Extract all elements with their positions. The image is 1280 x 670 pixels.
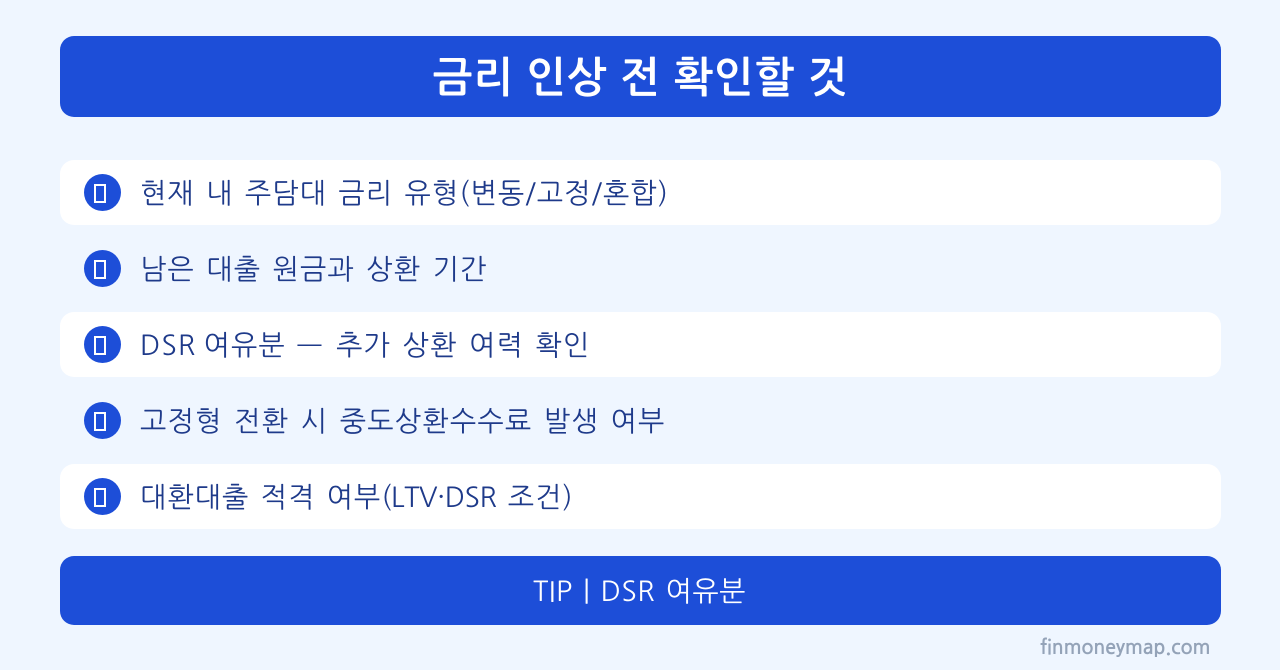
tip banner bbox=[60, 556, 1221, 625]
icon: bullet 3 bbox=[84, 326, 121, 363]
checklist item 2 bbox=[84, 250, 487, 287]
icon: bullet 1 bbox=[84, 174, 121, 211]
text: item 5: 대환대출 적격 여부(LTV·DSR 조건) bbox=[140, 484, 574, 512]
checklist item 4 bbox=[84, 402, 666, 439]
text: item 1: 현재 내 주담대 금리 유형(변동/고정/혼합) bbox=[140, 180, 669, 208]
icon: bullet 5 bbox=[84, 478, 121, 515]
title banner bbox=[60, 36, 1221, 117]
brand watermark: finmoneymap.com bbox=[1040, 637, 1210, 657]
icon: bullet 2 bbox=[84, 250, 121, 287]
text: item 2: 남은 대출 원금과 상환 기간 bbox=[140, 256, 487, 284]
checklist item 3 bbox=[60, 312, 1221, 377]
icon: bullet 4 bbox=[84, 402, 121, 439]
title banner: 금리 인상 전 확인할 것 bbox=[433, 58, 848, 99]
checklist item 5 bbox=[60, 464, 1221, 529]
tip banner: TIP | DSR 여유분 bbox=[533, 578, 746, 606]
text: item 3: DSR 여유분 — 추가 상환 여력 확인 bbox=[140, 332, 590, 360]
text: item 4: 고정형 전환 시 중도상환수수료 발생 여부 bbox=[140, 408, 666, 436]
checklist item 1 bbox=[60, 160, 1221, 225]
